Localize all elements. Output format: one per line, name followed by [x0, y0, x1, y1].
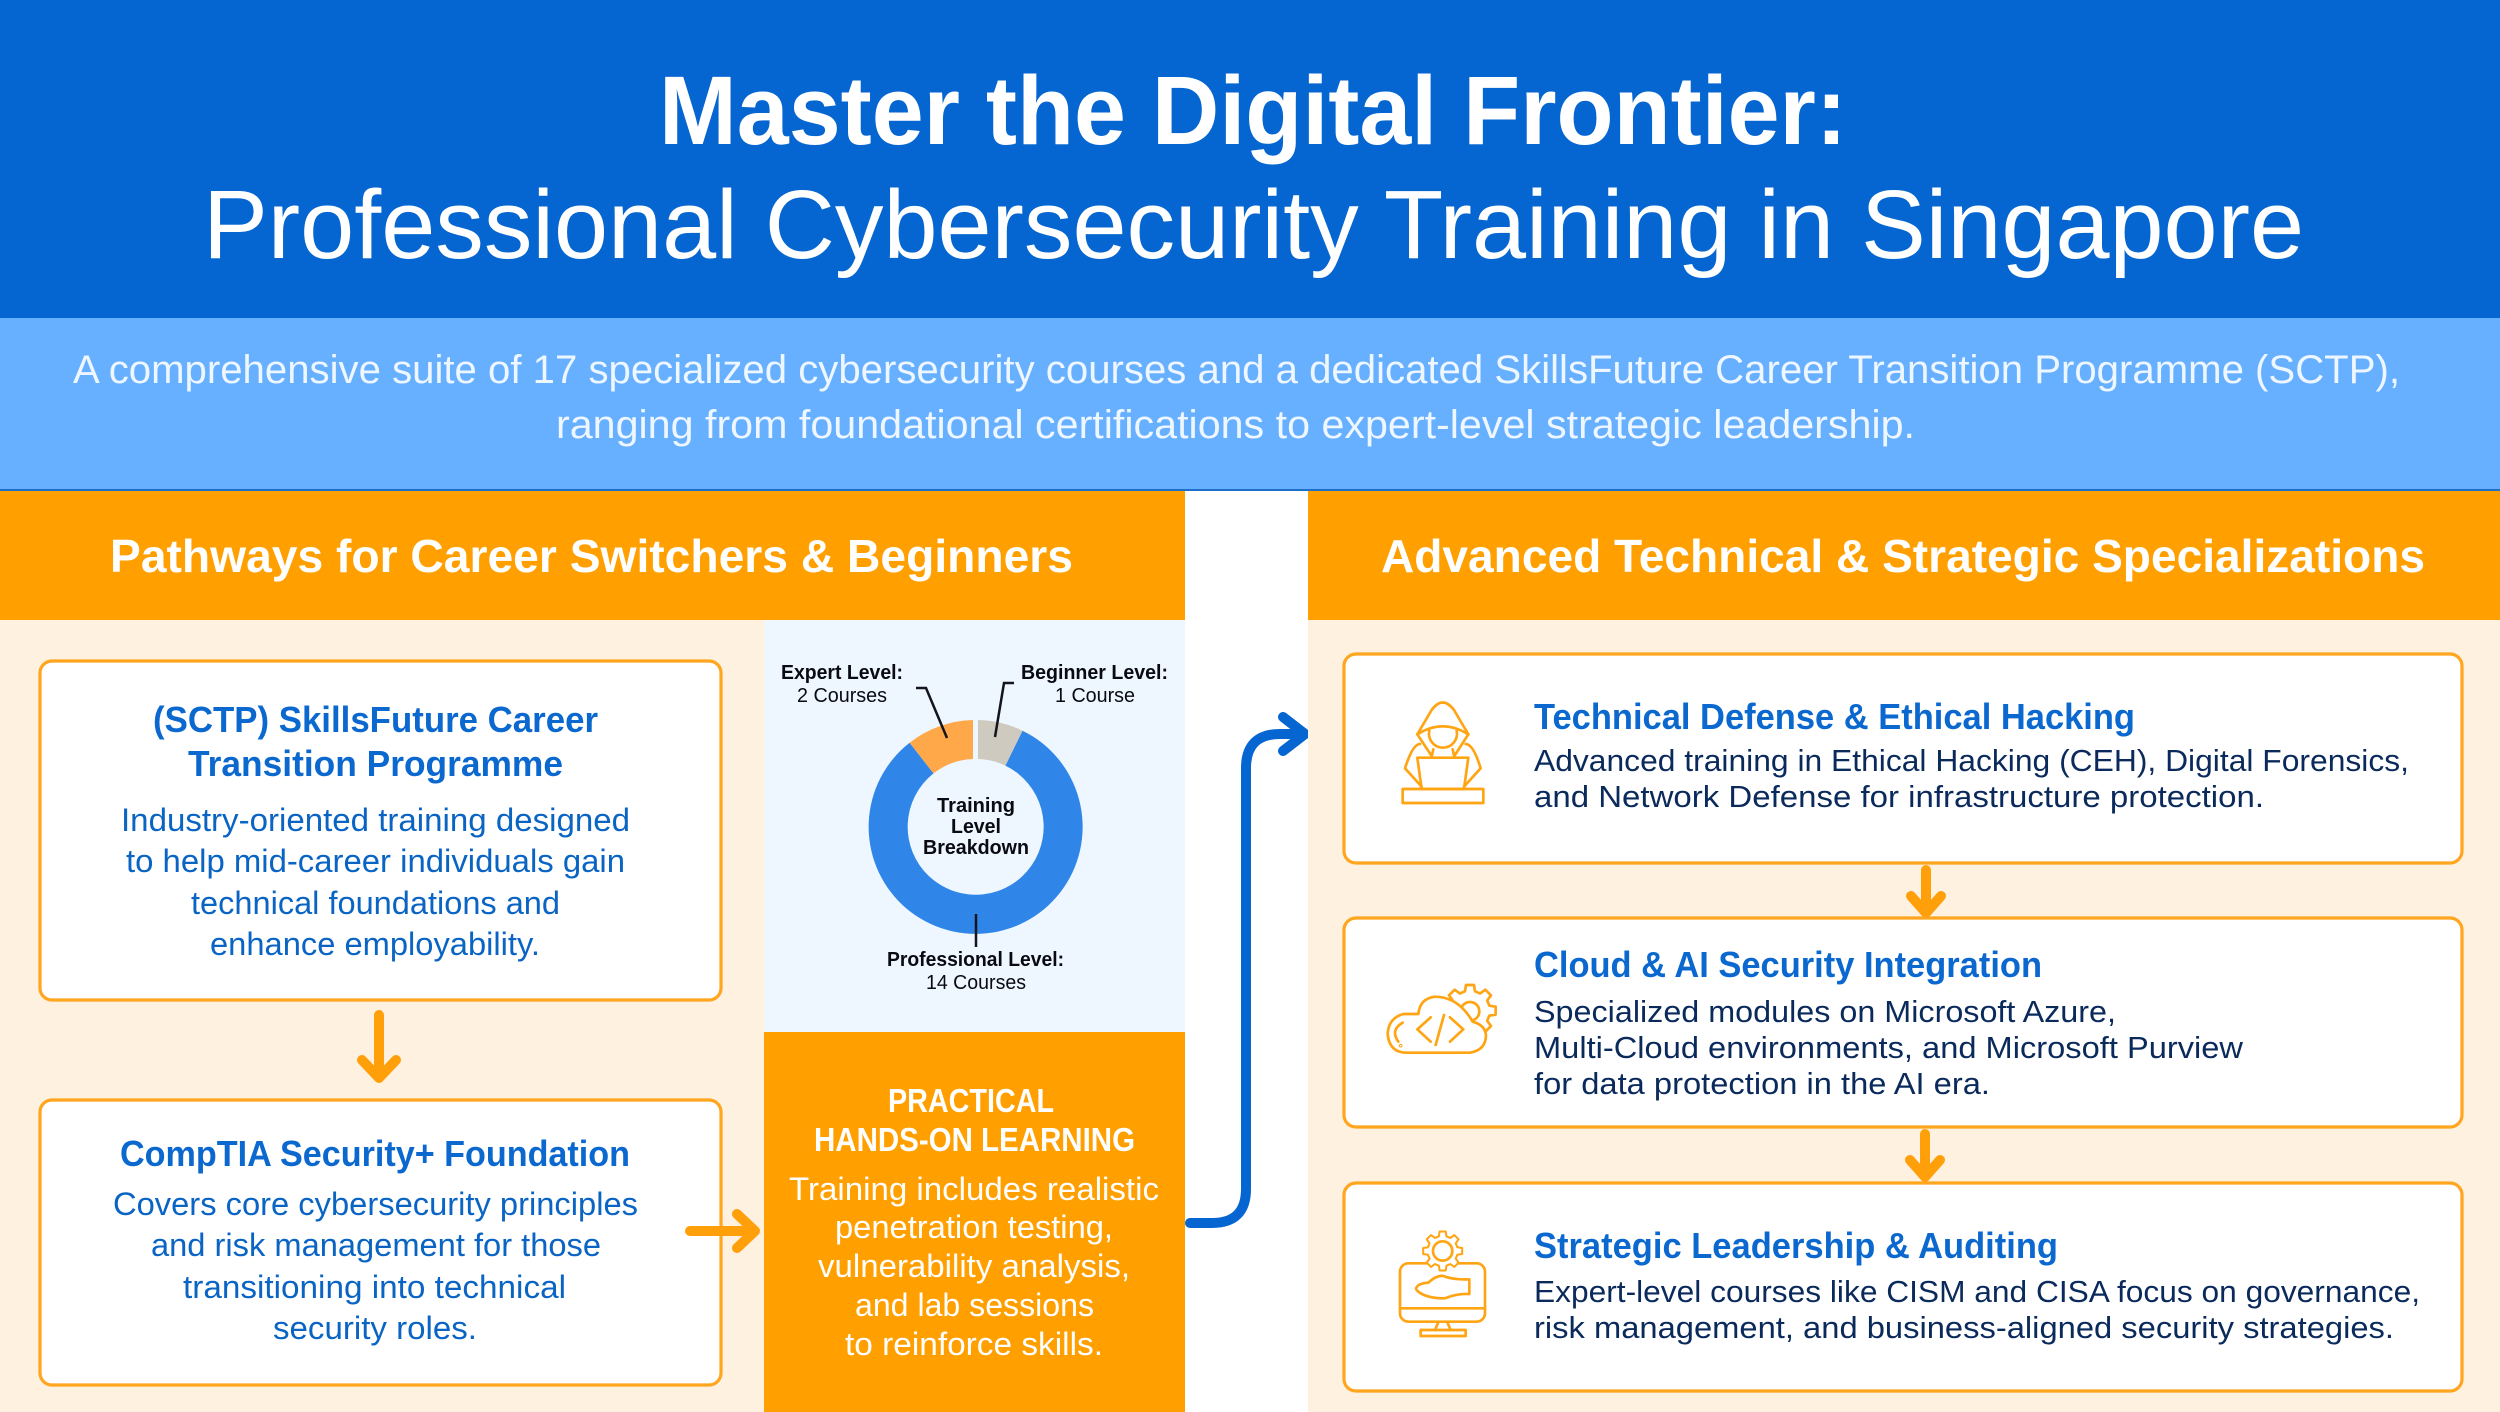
- arrow: SCTP to CompTIA: [362, 1015, 396, 1078]
- panel: advanced technical and strategic specializations: [1308, 491, 2500, 1412]
- panel: practical hands-on learning: HANDS-ON LEARNING: [814, 1121, 1135, 1158]
- card: cloud and AI security integration: Specialized modules on Microsoft Azure,: [1534, 994, 2116, 1029]
- donut centre label: Breakdown: [923, 837, 1029, 859]
- card: technical defense and ethical hacking: [1344, 654, 2462, 863]
- icon: hooded hacker with laptop: [1403, 702, 1483, 803]
- card: technical defense and ethical hacking: Technical Defense & Ethical Hacking: [1534, 696, 2135, 737]
- card: strategic leadership and auditing: risk management, and business-aligned security strategies.: [1534, 1310, 2394, 1345]
- card: SCTP programme: Industry-oriented training designed: [121, 802, 630, 838]
- segment: expert level: [910, 720, 973, 773]
- card: strategic leadership and auditing: Expert-level courses like CISM and CISA focus on governance,: [1534, 1274, 2420, 1309]
- card: CompTIA Security+: transitioning into technical: [183, 1269, 566, 1305]
- label: expert level: Expert Level:: [781, 662, 903, 684]
- panel: practical hands-on learning: Training includes realistic: [789, 1171, 1159, 1207]
- card: cloud and AI security integration: Cloud & AI Security Integration: [1534, 944, 2042, 985]
- label: professional level: [887, 949, 1064, 994]
- subtitle band: ranging from foundational certifications to expert-level strategic leadership.: [556, 403, 1915, 447]
- label: professional level: 14 Courses: [926, 972, 1026, 994]
- title: [203, 56, 2304, 279]
- icon: cloud with code and gear: [1388, 985, 1496, 1053]
- card: CompTIA Security+: security roles.: [273, 1310, 477, 1346]
- label: beginner level: Beginner Level:: [1021, 662, 1168, 684]
- arrow: technical defense to cloud security: [1911, 870, 1941, 913]
- card: cloud and AI security integration: [1344, 918, 2462, 1127]
- card: SCTP programme: to help mid-career individuals gain: [126, 843, 625, 879]
- subtitle band: [0, 318, 2500, 491]
- leader lines: [916, 683, 1014, 947]
- panel: practical hands-on learning: [764, 1032, 1185, 1412]
- panel: practical hands-on learning: PRACTICAL: [888, 1082, 1054, 1119]
- heading: pathways: [0, 491, 1185, 620]
- panel: practical hands-on learning: vulnerability analysis,: [818, 1248, 1130, 1284]
- label: expert level: [781, 662, 903, 707]
- icon: monitor with hand and gear: [1400, 1231, 1485, 1336]
- card: SCTP programme: technical foundations and: [191, 885, 560, 921]
- card: CompTIA Security+: and risk management for those: [151, 1227, 601, 1263]
- segment: beginner level: [978, 720, 1022, 766]
- donut centre label: [923, 795, 1029, 859]
- label: professional level: Professional Level:: [887, 949, 1064, 971]
- card: technical defense and ethical hacking: and Network Defense for infrastructure protection.: [1534, 779, 2264, 814]
- arrow: hands-on learning to advanced specializations: [1190, 717, 1305, 1223]
- heading: advanced specializations: [1308, 491, 2500, 620]
- donut centre label: Level: [951, 816, 1001, 838]
- donut centre label: Training: [937, 795, 1015, 817]
- card: cloud and AI security integration: for data protection in the AI era.: [1534, 1066, 1990, 1101]
- segment: professional level: [869, 731, 1083, 934]
- card: strategic leadership and auditing: Strategic Leadership & Auditing: [1534, 1225, 2058, 1266]
- card: CompTIA Security+: Covers core cybersecurity principles: [113, 1186, 638, 1222]
- label: expert level: 2 Courses: [797, 685, 887, 707]
- panel: practical hands-on learning: and lab sessions: [855, 1287, 1094, 1323]
- label: beginner level: [1021, 662, 1168, 707]
- card: cloud and AI security integration: Multi-Cloud environments, and Microsoft Purview: [1534, 1030, 2244, 1065]
- label: beginner level: 1 Course: [1055, 685, 1135, 707]
- panel: practical hands-on learning: penetration testing,: [835, 1209, 1113, 1245]
- arrow: cloud security to strategic leadership: [1910, 1134, 1940, 1177]
- arrow: CompTIA to hands-on learning: [690, 1214, 755, 1248]
- heading: advanced specializations: Advanced Technical & Strategic Specializations: [1381, 530, 2425, 582]
- title: Professional Cybersecurity Training in Singapore: [203, 170, 2304, 279]
- card: SCTP programme: Transition Programme: [188, 743, 563, 784]
- header banner: [0, 0, 2500, 318]
- card: technical defense and ethical hacking: Advanced training in Ethical Hacking (CEH), Digital Forensics,: [1534, 743, 2409, 778]
- card: strategic leadership and auditing: [1344, 1183, 2462, 1391]
- panel: practical hands-on learning: to reinforce skills.: [845, 1326, 1103, 1362]
- subtitle band: A comprehensive suite of 17 specialized cybersecurity courses and a dedicated SkillsFuture Career Transition Programme (SCTP),: [73, 348, 2400, 392]
- card: CompTIA Security+: CompTIA Security+ Foundation: [120, 1133, 630, 1174]
- title: Master the Digital Frontier:: [659, 56, 1847, 165]
- panel: pathways for career switchers and beginners: [0, 491, 1185, 1412]
- donut chart: training level breakdown: [764, 620, 1185, 1032]
- card: SCTP programme: [40, 661, 721, 1000]
- card: SCTP programme: (SCTP) SkillsFuture Career: [153, 699, 598, 740]
- card: SCTP programme: enhance employability.: [210, 926, 540, 962]
- card: CompTIA Security+: [40, 1100, 721, 1385]
- heading: pathways: Pathways for Career Switchers & Beginners: [110, 530, 1073, 582]
